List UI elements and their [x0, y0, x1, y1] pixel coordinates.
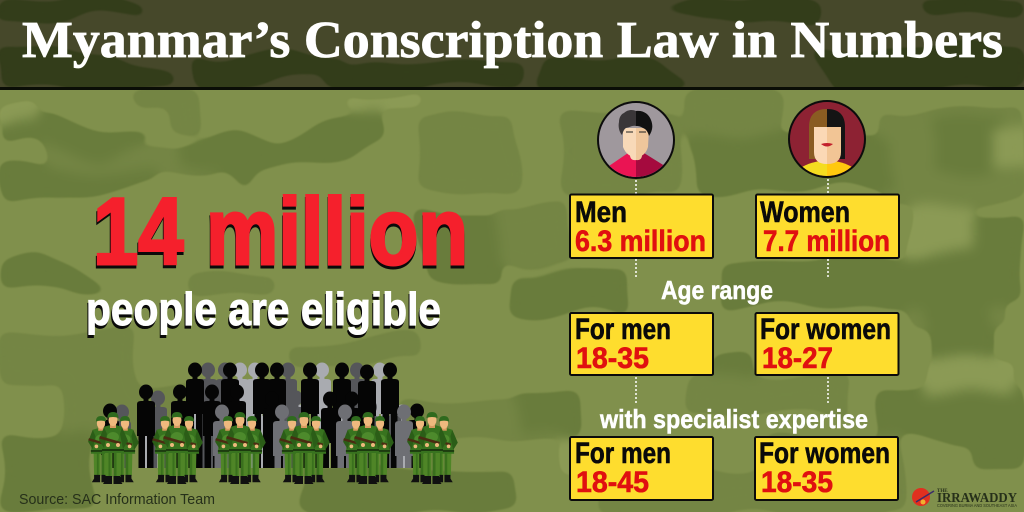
icon: woman avatar — [788, 100, 866, 180]
subheading: people are eligible: people are eligible — [86, 283, 441, 335]
header band — [0, 0, 1024, 90]
logo: The Irrawaddy — [912, 488, 1017, 508]
box: men specialist: 18-45 — [576, 466, 649, 499]
logo: The Irrawaddy: THE — [937, 489, 948, 494]
source: Source: SAC Information Team — [19, 492, 215, 508]
icon: man avatar — [597, 101, 675, 179]
box: women age range: 18-27 — [762, 342, 833, 375]
box: women age range: For women — [760, 313, 891, 346]
connector lines — [636, 179, 828, 405]
headline number: 14 million: 14 million — [92, 182, 468, 288]
box: men total: 6.3 million — [575, 225, 706, 258]
box: men total — [570, 194, 713, 258]
box: women total: Women — [760, 196, 850, 229]
heading: with specialist expertise: with specialist expertise — [599, 404, 868, 434]
box: men specialist: For men — [575, 437, 671, 470]
box: women specialist: For women — [759, 437, 890, 470]
logo: The Irrawaddy: IRRAWADDY — [937, 491, 1017, 506]
box: men age range: For men — [575, 313, 671, 346]
box: men age range: 18-35 — [576, 342, 649, 375]
subheading: people are eligible: people are eligible — [85, 286, 440, 338]
box: women age range — [756, 313, 898, 375]
box: men specialist — [570, 437, 713, 500]
box: women total — [756, 194, 899, 258]
headline number: 14 million: 14 million — [93, 179, 468, 285]
box: men age range — [570, 313, 713, 375]
box: men total: Men — [575, 196, 627, 229]
crowd of civilians silhouettes — [101, 362, 426, 468]
box: women total: 7.7 million — [763, 225, 890, 258]
box: women specialist: 18-35 — [761, 466, 833, 499]
heading: age range: Age range — [661, 275, 773, 305]
box: women specialist — [755, 437, 898, 500]
soldiers — [88, 412, 458, 484]
title: Myanmar’s Conscription Law in Numbers — [22, 12, 1003, 69]
